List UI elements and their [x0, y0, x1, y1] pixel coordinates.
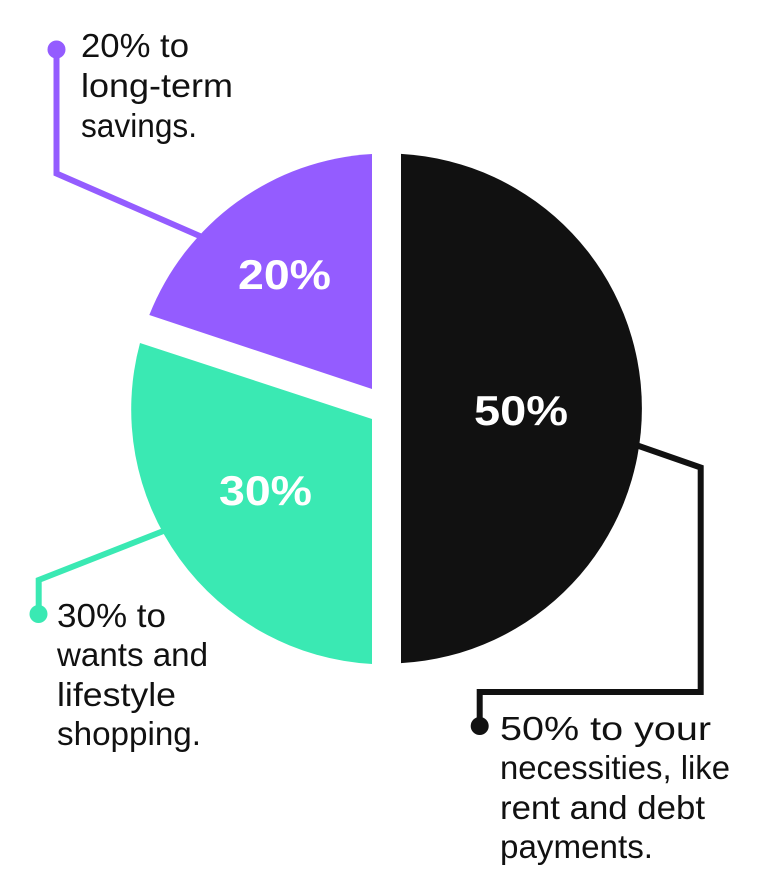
- caption: savings: [81, 27, 233, 144]
- caption: wants: lifestyle: [57, 676, 176, 713]
- slice value: 20%: 20%: [238, 251, 331, 298]
- caption: savings: 20% to: [81, 27, 189, 64]
- caption: savings: savings.: [81, 107, 197, 144]
- caption: wants: [56, 597, 208, 752]
- slice value: 30%: 30%: [219, 467, 312, 514]
- connector: wants: [30, 530, 166, 623]
- caption: necessities: [500, 710, 730, 865]
- connector: necessities: [471, 445, 701, 735]
- caption: wants: shopping.: [57, 715, 201, 752]
- pie slice: 50% necessities: [401, 154, 642, 663]
- caption: necessities: necessities, like: [500, 749, 730, 786]
- slice value: 50%: 50%: [474, 387, 568, 434]
- caption: wants: 30% to: [57, 597, 166, 634]
- pie slice: 30% wants: [131, 343, 372, 664]
- caption: necessities: 50% to your: [500, 710, 711, 747]
- caption: necessities: payments.: [500, 828, 653, 865]
- pie slice: 20% savings: [149, 154, 372, 389]
- caption: wants: wants and: [56, 636, 208, 673]
- connector: savings: [48, 40, 202, 237]
- caption: savings: long-term: [81, 67, 233, 104]
- caption: necessities: rent and debt: [500, 789, 705, 826]
